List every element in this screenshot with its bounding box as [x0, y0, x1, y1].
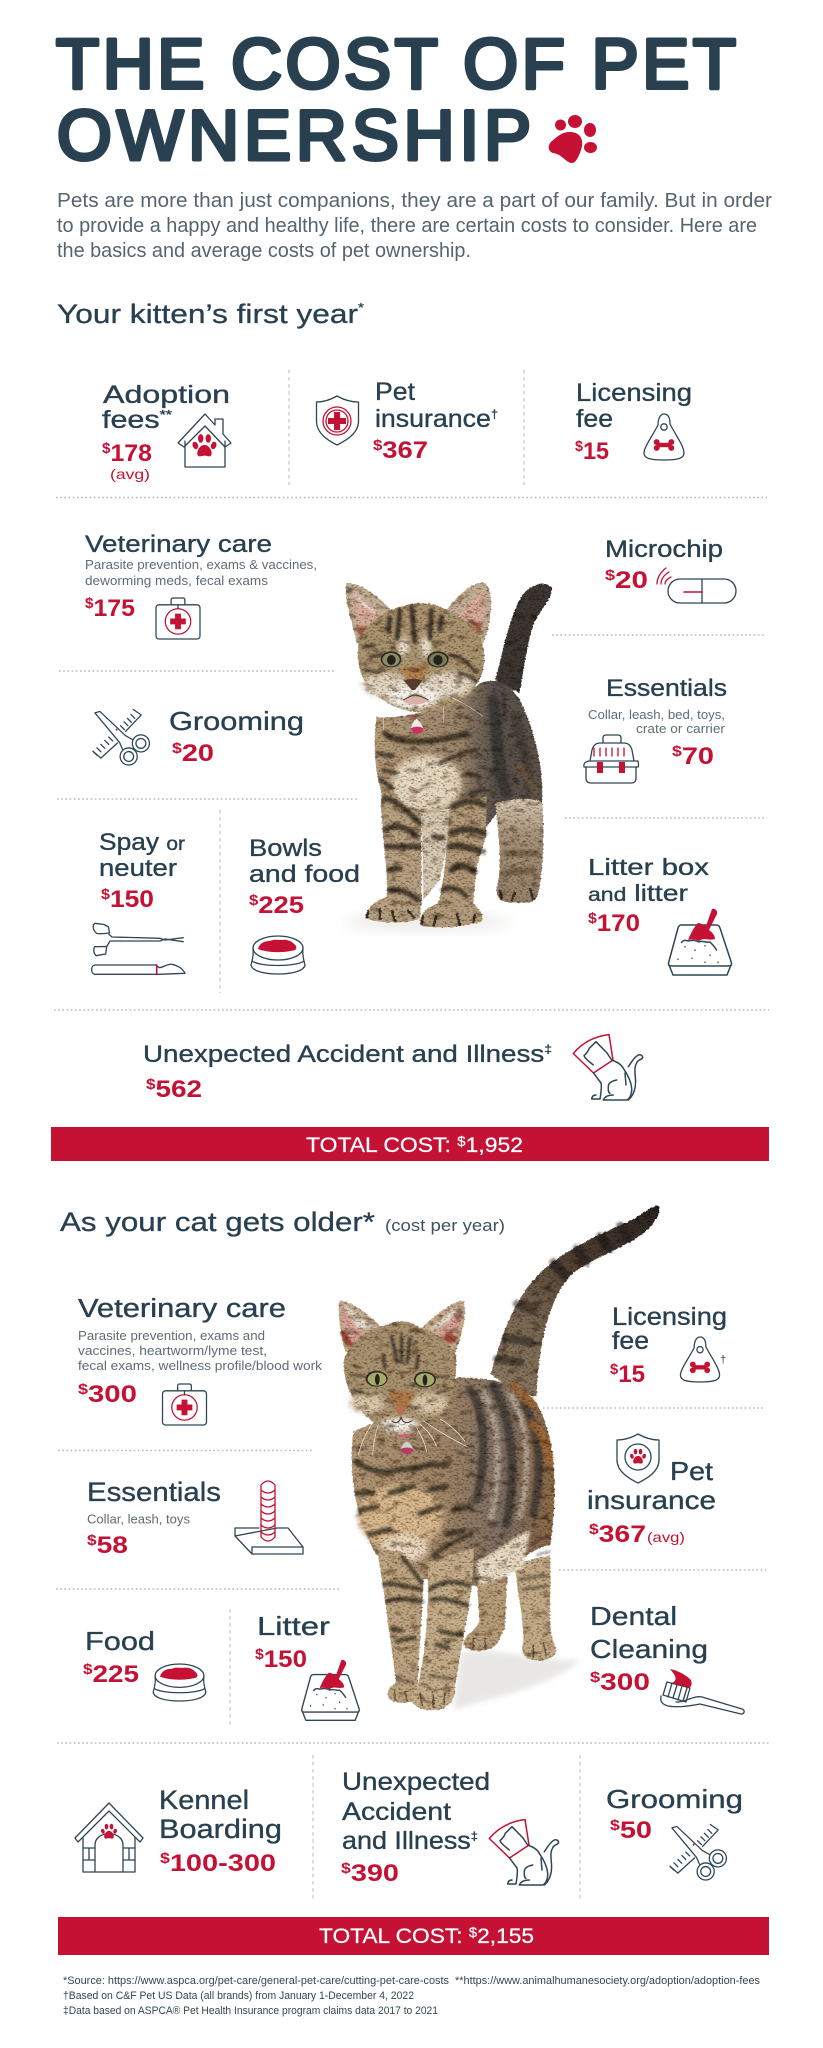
- middle belly and leg: [422, 808, 452, 900]
- panel: pet insurance (adult): insurance: [587, 1485, 716, 1515]
- icon: food bowl: [153, 1664, 206, 1701]
- back legs: [463, 1576, 507, 1651]
- panel: grooming (adult): [606, 1784, 743, 1880]
- panel: grooming (adult): $: [610, 1817, 621, 1834]
- panel: adoption fees: Adoption: [103, 381, 230, 409]
- panel: bowls and food: 225: [258, 892, 304, 919]
- panel: unexpected accident and illness (adult): and Illness: [342, 1827, 462, 1855]
- panel: essentials: [584, 675, 727, 783]
- panel: licensing fee (adult): 15: [618, 1361, 645, 1388]
- panel: bowls and food: and food: [249, 861, 360, 888]
- panel: dental cleaning: 300: [600, 1669, 650, 1696]
- total bar: adult: $: [469, 1924, 477, 1940]
- total bar: kitten: TOTAL COST:: [306, 1133, 442, 1157]
- panel: pet insurance (adult): (avg): [647, 1529, 685, 1545]
- panel: veterinary care: Veterinary care: [85, 531, 272, 558]
- panel: kennel boarding: 100-300: [170, 1850, 276, 1877]
- panel: veterinary care (adult): fecal exams, wellness profile/blood work: [78, 1359, 323, 1373]
- panel: adoption fees: $: [102, 440, 111, 457]
- total bar: adult: [58, 1917, 769, 1955]
- adult cat photo illustration: [339, 1206, 660, 1710]
- section heading: adult cat: As your cat gets older*: [60, 1207, 376, 1237]
- panel: spay or neuter: [92, 829, 186, 974]
- panel: licensing fee (adult): [610, 1303, 727, 1388]
- footnotes: *Source: https://www.aspca.org/pet-care/general-pet-care/cutting-pet-care-costs: [63, 1975, 449, 1987]
- intro paragraph: Pets are more than just companions, they are a part of our family. But in order: [57, 189, 772, 212]
- panel: adoption fees: 178: [110, 440, 152, 467]
- panel: veterinary care (adult): 300: [88, 1381, 137, 1408]
- torso: [375, 681, 542, 827]
- panel: litter box: Litter box: [588, 854, 709, 880]
- panel: spay or neuter: 150: [110, 886, 154, 913]
- face lights: [348, 1393, 385, 1414]
- panel: kennel boarding: [75, 1785, 282, 1877]
- panel: unexpected accident and illness (adult): ‡: [471, 1829, 478, 1843]
- icon: comb and scissors: [670, 1824, 726, 1880]
- panel: veterinary care: Parasite prevention, exams & vaccines,: [85, 558, 317, 572]
- total bar: kitten: [51, 1127, 769, 1161]
- panel: pet insurance (adult): [587, 1434, 716, 1548]
- total bar: kitten: 1,952: [466, 1133, 523, 1157]
- panel: essentials (adult): $: [87, 1532, 97, 1549]
- intro paragraph: to provide a happy and healthy life, there are certain costs to consider. Here are: [57, 214, 757, 237]
- panel: pet insurance: Pet: [375, 378, 415, 406]
- panel: essentials: $: [672, 743, 683, 760]
- panel: litter box: and litter: [588, 880, 688, 906]
- panel: veterinary care: $: [85, 595, 94, 612]
- panel: pet insurance: 367: [382, 437, 428, 464]
- icon: litter box: [668, 909, 732, 975]
- icon: first aid kit: [163, 1384, 206, 1425]
- icon: shield with paw: [617, 1434, 659, 1483]
- kitten photo illustration: [343, 582, 552, 929]
- panel: food: $: [83, 1661, 93, 1678]
- icon: cat with cone: [573, 1034, 643, 1100]
- panel: microchip: [605, 536, 736, 603]
- front legs: [377, 1548, 424, 1703]
- panel: pet insurance: $: [373, 437, 383, 454]
- panel: grooming (adult): 50: [620, 1817, 652, 1844]
- icon: first aid kit: [156, 598, 200, 639]
- panel: adoption fees: fees: [102, 406, 149, 434]
- panel: licensing fee (adult): fee: [612, 1327, 649, 1355]
- ears: [339, 1300, 465, 1355]
- icon: litter box: [302, 1660, 359, 1720]
- panel: bowls and food: $: [249, 892, 259, 909]
- panel: bowls and food: [249, 835, 360, 974]
- fur stripes: [378, 700, 537, 900]
- panel: pet insurance (adult): $: [589, 1521, 599, 1538]
- front right leg: [420, 797, 487, 927]
- panel: litter: 150: [264, 1646, 307, 1673]
- footnotes: **https://www.animalhumanesociety.org/adoption/adoption-fees: [455, 1975, 760, 1987]
- panel: veterinary care (adult): Veterinary care: [78, 1295, 286, 1323]
- panel: licensing fee: [575, 379, 692, 465]
- panel: grooming: $: [172, 740, 183, 757]
- panel: pet insurance (adult): Pet: [670, 1456, 714, 1486]
- body stripes: [357, 1226, 628, 1682]
- icon: toothbrush: [661, 1669, 744, 1714]
- toes: [395, 1638, 547, 1708]
- panel: veterinary care (adult): vaccines, heartworm/lyme test,: [78, 1344, 267, 1358]
- panel: licensing fee (adult): Licensing: [612, 1303, 727, 1331]
- panel: litter: [255, 1611, 359, 1720]
- panel: adoption fees: [102, 381, 231, 482]
- panel: food: Food: [85, 1626, 155, 1656]
- total bar: adult: TOTAL COST:: [319, 1924, 455, 1948]
- panel: veterinary care: [85, 531, 317, 639]
- panel: bowls and food: Bowls: [249, 835, 322, 862]
- panel: essentials: crate or carrier: [636, 722, 725, 736]
- tail: [491, 1206, 660, 1397]
- icon: dog house: [75, 1803, 143, 1872]
- panel: microchip: Microchip: [605, 536, 723, 563]
- cheeks and muzzle: [362, 672, 408, 698]
- icon: microchip capsule: [657, 568, 736, 603]
- icon: food bowl: [251, 936, 305, 974]
- section heading: kitten: *: [358, 300, 364, 315]
- panel: unexpected accident and illness: 562: [155, 1076, 202, 1103]
- panel: essentials: 70: [682, 743, 714, 770]
- panel: essentials (adult): Collar, leash, toys: [87, 1512, 190, 1526]
- head: [358, 603, 484, 712]
- panel: essentials: Collar, leash, bed, toys,: [588, 708, 725, 722]
- total bar: kitten: $: [457, 1133, 466, 1149]
- panel: kennel boarding: Kennel: [159, 1785, 249, 1815]
- panel: unexpected accident and illness: [143, 1034, 643, 1103]
- front left leg: [365, 790, 422, 923]
- panel: grooming (adult): Grooming: [606, 1784, 743, 1814]
- panel: licensing fee: 15: [583, 438, 609, 465]
- icon: shield with cross: [316, 396, 358, 445]
- panel: veterinary care (adult): $: [78, 1381, 89, 1398]
- icon: bone tag: [644, 414, 684, 460]
- footnotes: [63, 1975, 760, 2017]
- panel: unexpected accident and illness (adult): Accident: [342, 1798, 451, 1826]
- title: THE COST OF PET: [56, 24, 736, 103]
- back leg: [495, 799, 544, 903]
- panel: unexpected accident and illness (adult): $: [341, 1860, 352, 1877]
- panel: pet insurance: insurance: [375, 405, 483, 433]
- panel: unexpected accident and illness (adult): [341, 1768, 559, 1887]
- footnotes: ‡Data based on ASPCA® Pet Health Insurance program claims data 2017 to 2021: [63, 2005, 438, 2017]
- section heading: adult cat: (cost per year): [385, 1216, 505, 1235]
- ears: [345, 582, 491, 643]
- tail: [495, 584, 552, 693]
- section heading: kitten: Your kitten’s first year: [57, 299, 314, 329]
- panel: licensing fee: Licensing: [576, 379, 692, 407]
- head: [344, 1321, 456, 1432]
- panel: licensing fee: fee: [576, 405, 613, 433]
- panel: dental cleaning: Cleaning: [590, 1634, 708, 1664]
- panel: unexpected accident and illness (adult): Unexpected: [342, 1768, 490, 1796]
- panel: dental cleaning: Dental: [590, 1601, 677, 1631]
- intro paragraph: the basics and average costs of pet ownership.: [57, 239, 471, 262]
- forehead stripes: [350, 1336, 448, 1393]
- panel: microchip: 20: [615, 567, 648, 594]
- panel: grooming: 20: [182, 740, 214, 767]
- panel: veterinary care (adult): [78, 1295, 323, 1425]
- forehead stripes: [363, 607, 477, 682]
- panel: licensing fee (adult): †: [720, 1354, 726, 1366]
- panel: pet insurance (adult): 367: [599, 1521, 646, 1548]
- paw claws: [367, 888, 533, 927]
- panel: unexpected accident and illness (adult): 390: [351, 1860, 399, 1887]
- panel: pet insurance: †: [491, 407, 498, 421]
- total bar: adult: 2,155: [477, 1924, 534, 1948]
- icon: house with paw: [178, 414, 231, 467]
- panel: food: [83, 1626, 206, 1701]
- panel: litter: Litter: [257, 1611, 330, 1641]
- panel: grooming: [93, 706, 304, 767]
- panel: essentials (adult): [87, 1477, 303, 1559]
- title: [56, 24, 736, 174]
- icon: red paw: [549, 115, 597, 163]
- torso: [352, 1378, 555, 1586]
- panel: microchip: $: [605, 567, 616, 584]
- belly light: [477, 1531, 530, 1586]
- panel: food: 225: [92, 1661, 139, 1688]
- section heading: adult cat: [60, 1207, 505, 1237]
- panel: litter: $: [255, 1646, 265, 1663]
- panel: essentials: Essentials: [606, 675, 727, 702]
- panel: kennel boarding: Boarding: [159, 1814, 282, 1844]
- panel: grooming: Grooming: [169, 706, 304, 736]
- panel: unexpected accident and illness: $: [146, 1076, 156, 1093]
- adult eyes and face: [366, 1371, 388, 1387]
- kitten eyes and face: [381, 651, 401, 667]
- panel: veterinary care: deworming meds, fecal exams: [85, 574, 268, 588]
- icon: cat with cone: [489, 1820, 559, 1885]
- intro paragraph: [57, 189, 772, 262]
- footnotes: †Based on C&F Pet US Data (all brands) from January 1-December 4, 2022: [63, 1990, 414, 2002]
- panel: spay or neuter: Spay or: [99, 829, 186, 856]
- panel: pet insurance: [316, 378, 498, 464]
- panel: essentials (adult): 58: [97, 1532, 128, 1559]
- panel: litter box: 170: [597, 910, 640, 937]
- panel: unexpected accident and illness: ‡: [544, 1042, 552, 1056]
- icon: scratching post: [235, 1481, 303, 1554]
- panel: spay or neuter: $: [101, 886, 111, 903]
- icon: surgical tools: [92, 923, 185, 974]
- panel: essentials (adult): Essentials: [87, 1477, 221, 1507]
- chest light: [357, 1484, 443, 1550]
- icon: pet carrier: [584, 735, 638, 783]
- icon: comb and scissors: [93, 709, 149, 765]
- title: OWNERSHIP: [57, 96, 531, 174]
- panel: dental cleaning: [590, 1601, 744, 1714]
- icon: bone tag: [680, 1337, 720, 1382]
- panel: litter box: $: [588, 910, 598, 927]
- panel: adoption fees: **: [160, 407, 172, 422]
- panel: unexpected accident and illness: Unexpected Accident and Illness: [143, 1041, 490, 1068]
- panel: spay or neuter: neuter: [99, 855, 177, 882]
- chest light: [392, 755, 462, 812]
- panel: kennel boarding: $: [160, 1850, 171, 1867]
- panel: adoption fees: (avg): [110, 466, 150, 482]
- panel: litter box: [588, 854, 732, 975]
- panel: licensing fee: $: [575, 438, 584, 455]
- panel: veterinary care: 175: [93, 595, 135, 622]
- panel: licensing fee (adult): $: [610, 1361, 619, 1378]
- panel: dental cleaning: $: [590, 1669, 601, 1686]
- panel: veterinary care (adult): Parasite prevention, exams and: [78, 1329, 265, 1343]
